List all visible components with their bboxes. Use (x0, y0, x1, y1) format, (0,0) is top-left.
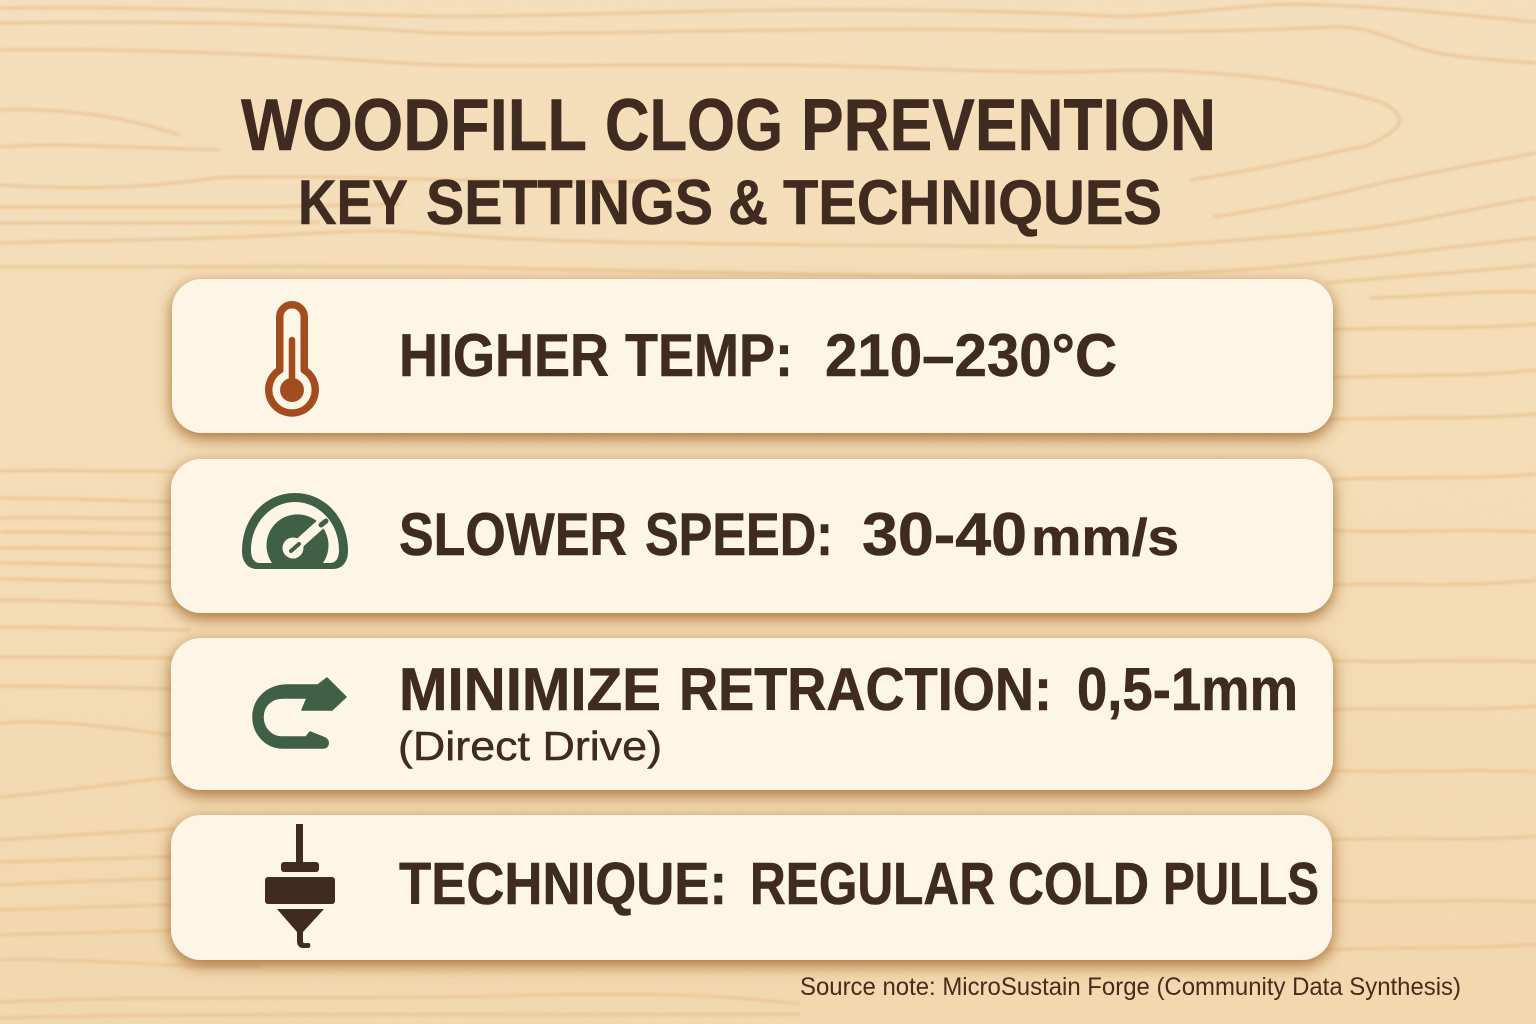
subtitle: & (728, 168, 768, 238)
subtitle: SETTINGS (426, 168, 713, 238)
value: speed range: 30-40 (862, 501, 1027, 568)
subtitle: KEY (298, 168, 408, 238)
panel: higher temp (172, 279, 1333, 433)
icon: nozzle (265, 824, 335, 948)
title: WOODFILL (241, 85, 587, 166)
title: CLOG (605, 85, 783, 166)
value: regular cold pulls (750, 851, 1319, 917)
icon: thermometer (269, 305, 315, 413)
label: higher temp: TEMP: (625, 322, 793, 389)
label: slower speed (399, 501, 833, 568)
icon: retraction arrow (253, 678, 346, 748)
value: regular cold pulls: REGULAR (750, 851, 995, 917)
label: minimize retraction: RETRACTION: (679, 656, 1052, 723)
icon: speedometer (242, 493, 348, 569)
label: slower speed: SPEED: (645, 501, 833, 568)
value: temperature range: 210–230°C (825, 322, 1117, 389)
subtitle: TECHNIQUES (783, 168, 1162, 238)
panel: minimize retraction (171, 638, 1333, 790)
label: slower speed: SLOWER (399, 501, 627, 568)
label: minimize retraction: MINIMIZE (399, 656, 661, 723)
label: technique: TECHNIQUE: (399, 851, 727, 917)
note: direct drive: (Direct Drive) (398, 723, 662, 769)
value: regular cold pulls: COLD (1008, 851, 1149, 917)
panel: technique (171, 815, 1332, 960)
value: speed unit: mm/s (1031, 509, 1179, 567)
subtitle (298, 168, 1162, 238)
title (241, 85, 1216, 166)
label: higher temp: HIGHER (399, 322, 609, 389)
value: regular cold pulls: PULLS (1163, 851, 1319, 917)
title: PREVENTION (801, 85, 1216, 166)
value: retraction range: 0,5-1mm (1077, 656, 1298, 723)
panel: slower speed (171, 459, 1333, 613)
source note: Source note: MicroSustain Forge (Community Data Synthesis) (800, 973, 1461, 1001)
label: higher temp (399, 322, 793, 389)
label: minimize retraction (399, 656, 1052, 723)
